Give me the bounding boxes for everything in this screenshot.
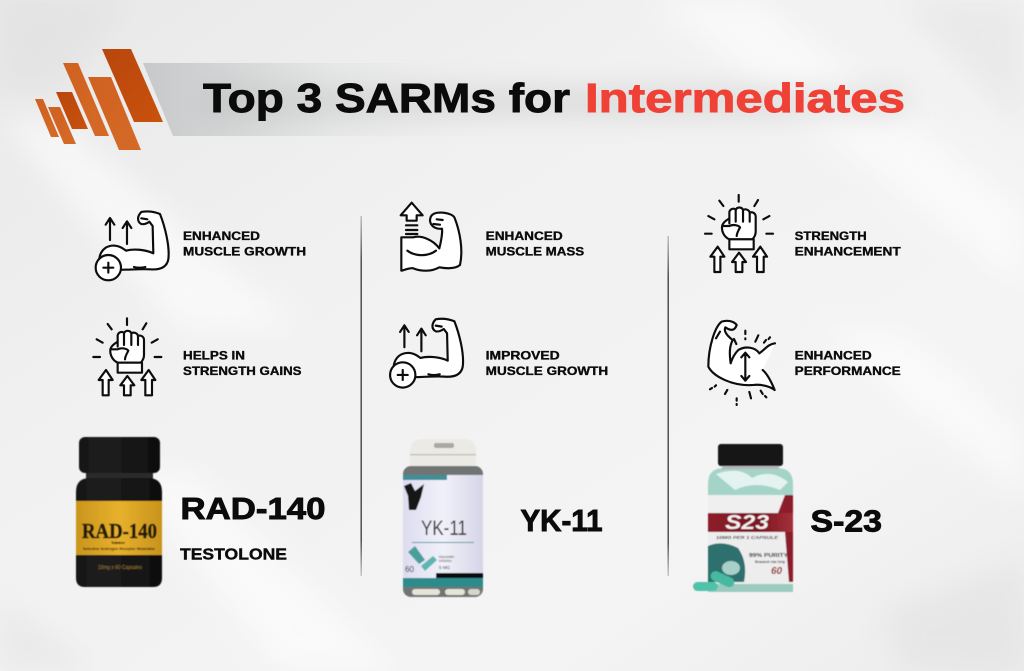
bottle: S-23 [693,444,793,592]
bottle: S-23: 60 [771,566,783,577]
name: S-23: S-23 [810,504,882,538]
label: helps in strength gains: STRENGTH GAINS [183,364,302,378]
subtitle: testolone: TESTOLONE [180,546,287,563]
label: strength enhancement [795,229,901,259]
bottle: YK-11: 5 MG [439,565,451,570]
label: enhanced muscle growth: ENHANCED [183,229,260,243]
label: enhanced performance: ENHANCED [795,348,872,362]
label: enhanced muscle growth [183,229,306,259]
divider 2 [668,236,669,576]
label: improved muscle growth: MUSCLE GROWTH [486,364,608,378]
icon: fist with arrows [705,195,773,272]
icon: flexed arm with plus [390,319,463,388]
title: Top 3 SARMs for [203,75,570,121]
icon: arm with up arrow [401,203,461,271]
bottle: YK-11: 60 [405,565,414,574]
label: improved muscle growth [486,348,608,378]
label: helps in strength gains: HELPS IN [183,348,245,362]
label: improved muscle growth: IMPROVED [486,348,560,362]
name: RAD-140: RAD-140 [180,491,326,526]
label: helps in strength gains [183,348,302,378]
bottle: RAD-140: Testolone [111,540,126,545]
label: strength enhancement: STRENGTH [795,229,867,243]
divider 1 [360,216,362,576]
bottle: RAD-140: RAD-140 [82,519,157,543]
label: enhanced muscle mass [486,229,584,259]
bottle: RAD-140: Selective Androgen Receptor Modulator [83,547,156,551]
bottle: S-23: 10MG PER 1 CAPSULE [716,535,779,541]
header banner [143,63,905,136]
bottle: YK-11 [403,439,483,597]
bottle: YK-11: Myostatin [439,555,454,559]
bottle: S-23: 99% PURITY [749,553,788,559]
bottle: S-23: S23 [725,512,769,534]
label: strength enhancement: ENHANCEMENT [795,245,901,259]
label: enhanced performance [795,348,901,378]
column: S-23 [693,195,901,592]
icon: flexed arm with double arrow [708,321,775,405]
title [203,75,905,121]
icon: fist with arrows [93,318,161,395]
label: enhanced muscle mass: ENHANCED [486,229,563,243]
bottle: YK-11: YK-11 [421,517,467,540]
bottle: RAD-140: 10mg x 60 Capsules [98,565,142,571]
name: YK-11: YK-11 [520,503,602,538]
bottle: S-23: Research Use Only [755,560,785,564]
title: Intermediates [585,75,905,121]
column: YK-11 [390,203,608,597]
label: enhanced performance: PERFORMANCE [795,364,901,378]
label: enhanced muscle mass: MUSCLE MASS [486,245,584,259]
bottle: YK-11: Inhibitor [439,559,453,563]
column: RAD-140 [76,211,326,587]
logo [35,49,163,150]
label: enhanced muscle growth: MUSCLE GROWTH [183,245,306,259]
bottle: RAD-140 [76,437,162,587]
icon: flexed arm with plus [96,211,169,280]
